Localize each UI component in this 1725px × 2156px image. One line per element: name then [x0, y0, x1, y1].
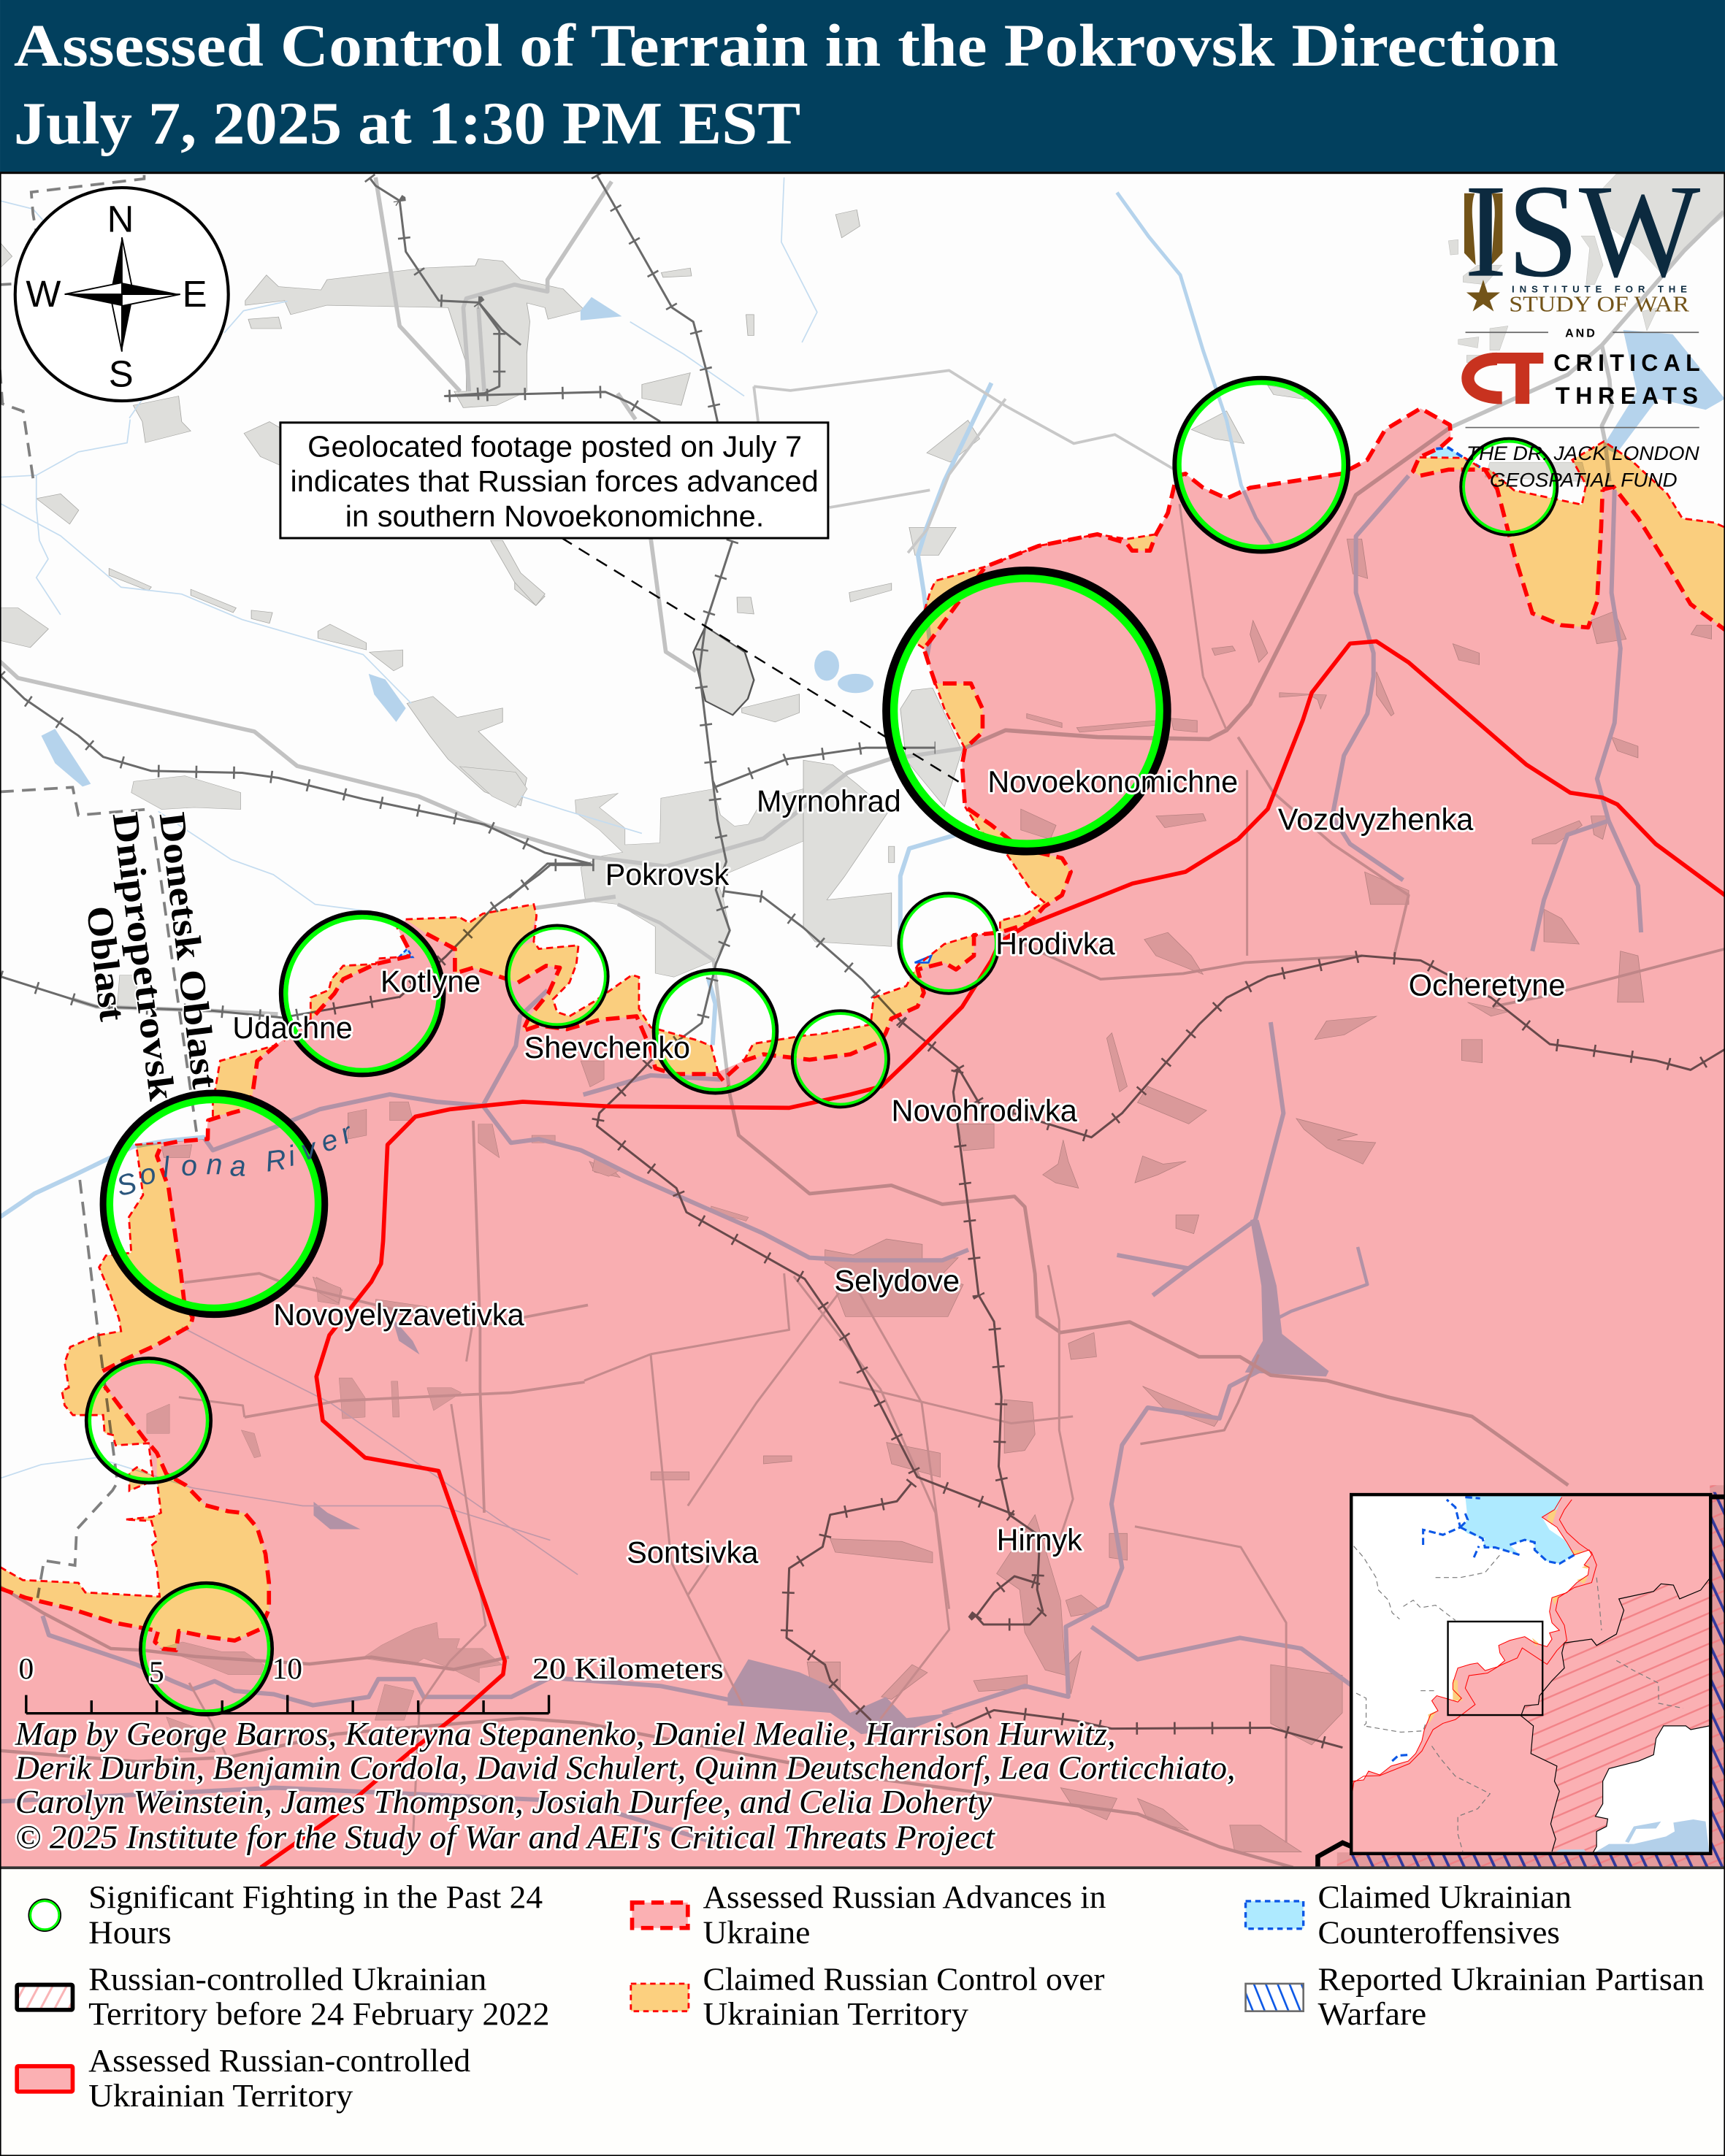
legend item: claimed Russian control: Ukrainian Territory [703, 1996, 968, 2032]
compass rose: E [183, 273, 207, 315]
legend item: assessed Russian-controlled territory: Assessed Russian-controlled [88, 2043, 470, 2079]
settlements: Myrnohrad south and Novoekonomichne [803, 385, 1306, 946]
label: Oblast: Oblast [79, 904, 134, 1024]
callout: geolocated footage annotation [280, 423, 828, 538]
inset map: Ukraine overview [1351, 1495, 1710, 1854]
inset: claimed counteroffensive area [1461, 1496, 1575, 1564]
circle: Novoekonomichne [887, 571, 1167, 851]
circle: Udachne-Kotlyne [281, 913, 443, 1075]
legend item: significant fighting [28, 1879, 543, 1950]
area: claimed Russian control, small pocket [129, 1468, 157, 1491]
label: Ocheretyne: Ocheretyne [1409, 967, 1565, 1002]
rivers and reservoirs [0, 177, 1725, 1843]
logo: Dr. Jack London Geospatial Fund [1466, 442, 1700, 491]
legend item: claimed Ukrainian counteroffensives: Counteroffensives [1317, 1914, 1560, 1950]
legend item: significant fighting: Hours [88, 1914, 172, 1950]
legend item: claimed Ukrainian counteroffensives [1246, 1879, 1572, 1950]
inset: counteroffensive dashed outline [1392, 1497, 1575, 1761]
legend item: pre-2022 Russian-controlled territory: Territory before 24 February 2022 [88, 1996, 549, 2032]
label: Pokrovsk: Pokrovsk [605, 857, 730, 891]
legend item: assessed Russian advances [632, 1879, 1106, 1950]
callout: geolocated footage annotation: in southern Novoekonomichne. [345, 499, 764, 533]
railway lines [0, 174, 1725, 1748]
circle: Shevchenko [506, 926, 608, 1027]
logo: Study of War: STUDY OF WAR [1509, 291, 1690, 316]
legend item: claimed Ukrainian counteroffensives: Claimed Ukrainian [1317, 1879, 1572, 1915]
area: claimed Russian control, Shevchenko [506, 942, 651, 1031]
circle: Hrodivka [899, 894, 999, 994]
map credits [15, 1716, 1235, 1855]
map credits: Derik Durbin, Benjamin Cordola, David Schulert, Quinn Deutschendorf, Lea Corticchiato, [15, 1750, 1235, 1787]
circle: south-west [86, 1359, 211, 1483]
label: Dnipropetrovsk: Dnipropetrovsk [105, 810, 183, 1103]
circle: north-east [1461, 439, 1557, 535]
legend item: assessed Russian-controlled territory: Ukrainian Territory [88, 2078, 353, 2114]
circle: northern front [1175, 378, 1348, 551]
map credits: © 2025 Institute for the Study of War and AEI's Critical Threats Project [15, 1819, 995, 1855]
area: claimed Russian control, above the Novoekonomichne circle [915, 567, 986, 648]
inset: frame [1351, 1495, 1710, 1854]
logos: ISW, Critical Threats, Geospatial Fund [1464, 157, 1701, 491]
title banner [0, 0, 1725, 174]
label: Novohrodivka: Novohrodivka [892, 1094, 1078, 1128]
settlements: Pokrovsk and Myrnohrad urban areas [118, 767, 803, 1009]
area: claimed Russian control, Udachne strip [310, 964, 375, 1020]
area: claimed Russian control, central strip [651, 1027, 718, 1074]
scale bar: 10 [272, 1651, 302, 1685]
area: claimed Russian control, Novoekonomichne [936, 683, 982, 748]
legend item: significant fighting: Significant Fighting in the Past 24 [88, 1879, 543, 1915]
scale bar: 20 Kilometers [532, 1651, 724, 1685]
inset: Russian-controlled area [1351, 1495, 1710, 1854]
place labels [79, 764, 1565, 1570]
area: claimed Russian control, western flank [62, 1145, 193, 1446]
legend item: assessed Russian-controlled territory [17, 2043, 470, 2114]
label: Shevchenko: Shevchenko [524, 1030, 690, 1064]
label: Donetsk Oblast: Donetsk Oblast [152, 810, 226, 1091]
line: assessed Russian-controlled territory boundary [261, 641, 1725, 1868]
label: Solona River: Solona River [113, 1116, 358, 1202]
area: claimed Russian control, north-east pocket [1485, 442, 1725, 630]
settlements: upper occupied zone [1021, 539, 1711, 1063]
legend item: pre-2022 Russian-controlled territory: Russian-controlled Ukrainian [88, 1961, 486, 1997]
label: Novoyelyzavetivka: Novoyelyzavetivka [273, 1297, 525, 1332]
logo: Critical Threats wordmark [1553, 350, 1700, 409]
callout: geolocated footage annotation: indicates that Russian forces advanced [290, 464, 819, 498]
occupied territory: assessed Russian control and claimed areas [0, 408, 1725, 1868]
legend item: claimed Russian control [631, 1961, 1105, 2032]
oblast boundaries [0, 175, 196, 1598]
compass rose: W [26, 273, 61, 315]
logo: Dr. Jack London Geospatial Fund: GEOSPATIAL FUND [1490, 469, 1678, 491]
label: Hirnyk: Hirnyk [997, 1523, 1082, 1557]
label: Vozdvyzhenka: Vozdvyzhenka [1278, 802, 1474, 837]
label: Kotlyne: Kotlyne [380, 964, 481, 999]
label: Udachne: Udachne [232, 1010, 353, 1045]
area: claimed Russian control, south of Novoekonomichne [965, 807, 1071, 932]
map base: terrain, settlements, roads, rails, rivers [0, 173, 1725, 1868]
logo: Institute for the: INSTITUTE FOR THE [1512, 283, 1687, 294]
logo: and divider: AND [1565, 327, 1597, 339]
area: claimed Russian control, north-east sliver [1413, 457, 1485, 476]
circle: Solona River [103, 1093, 325, 1314]
compass rose: S [109, 353, 134, 394]
logo: Critical Threats wordmark: THREATS [1556, 383, 1698, 409]
logo: CT mark [1468, 358, 1543, 404]
compass rose [15, 188, 229, 401]
label: Sontsivka: Sontsivka [627, 1535, 759, 1570]
area: Russian-controlled territory [0, 408, 1725, 1868]
label: Hrodivka: Hrodivka [995, 927, 1116, 961]
roads [0, 177, 1725, 1868]
scale bar: 5 [149, 1655, 164, 1689]
inset: oblast boundaries [1354, 1546, 1683, 1852]
settlements: north-west map area [0, 210, 860, 806]
settlements: central and eastern occupied zone [589, 1033, 1376, 1852]
inset: pre-2022 occupation boundary [1521, 1578, 1710, 1853]
area: claimed Russian control, Kotlyne triangle [406, 905, 537, 979]
area: claimed Russian control, east strip [743, 935, 974, 1062]
circle: east of central [792, 1010, 889, 1107]
inset: solid Russian control line [1353, 1500, 1596, 1791]
legend item: reported Ukrainian partisan warfare: Reported Ukrainian Partisan [1317, 1961, 1705, 1997]
legend item: assessed Russian advances: Ukraine [703, 1914, 810, 1950]
label: Myrnohrad: Myrnohrad [757, 783, 901, 818]
significant fighting circles [86, 378, 1557, 1714]
claimed Ukrainian counteroffensive pocket [399, 448, 1480, 962]
settlements: north-east corner [1448, 174, 1724, 482]
circle: bottom-left [141, 1583, 272, 1714]
settlements: west of Solona [161, 1061, 749, 1318]
inset: area-of-interest box [1448, 1622, 1542, 1715]
logo: Critical Threats wordmark: CRITICAL [1553, 350, 1700, 376]
inset: orange claimed patches [1428, 1510, 1589, 1723]
circle: central [654, 970, 777, 1093]
map credits: Map by George Barros, Kateryna Stepanenko, Daniel Mealie, Harrison Hurwitz, [15, 1716, 1116, 1752]
area: claimed Russian control, small northern patch [1127, 534, 1156, 550]
scale bar: 0 [18, 1651, 34, 1685]
area: claimed Russian control, Udachne north [213, 1046, 273, 1116]
callout: geolocated footage annotation: Geolocated footage posted on July 7 [307, 429, 802, 463]
map credits: Carolyn Weinstein, James Thompson, Josiah Durfee, and Celia Doherty [15, 1784, 992, 1820]
inset: Crimea and Azov coast [1593, 1726, 1710, 1853]
logo: ISW wordmark: ISW [1464, 157, 1701, 305]
compass rose: N [107, 198, 134, 239]
label: Novoekonomichne: Novoekonomichne [987, 764, 1238, 799]
inset: front line [1353, 1497, 1591, 1781]
label: Selydove: Selydove [834, 1264, 960, 1298]
legend item: reported Ukrainian partisan warfare: Warfare [1317, 1996, 1426, 2032]
area: claimed Russian control, south-west [0, 1453, 269, 1650]
legend item: reported Ukrainian partisan warfare [1246, 1961, 1705, 2032]
settlements: south-west occupied zone [147, 1277, 502, 1752]
inset: sea [1554, 1819, 1710, 1853]
front line: assessed Russian advances (thick dashes) [0, 408, 1725, 1650]
front line: thin dashes around claimed areas [0, 442, 1725, 1597]
logo: Dr. Jack London Geospatial Fund: THE DR. JACK LONDON [1466, 442, 1700, 464]
legend item: assessed Russian advances: Assessed Russian Advances in [703, 1879, 1106, 1915]
legend panel [0, 1866, 1725, 2156]
legend item: pre-2022 Russian-controlled territory [17, 1961, 549, 2032]
title banner: July 7, 2025 at 1:30 PM EST [14, 90, 800, 157]
title banner: Assessed Control of Terrain in the Pokrovsk Direction [14, 12, 1558, 79]
callout leader line [562, 537, 964, 785]
logo: ISW gold pillars [1464, 193, 1502, 311]
partisan warfare band around the inset [1317, 1485, 1725, 1868]
inset: occupied before 2022 hatch [1521, 1578, 1710, 1853]
scale bar [18, 1651, 724, 1714]
legend item: claimed Russian control: Claimed Russian Control over [703, 1961, 1105, 1997]
